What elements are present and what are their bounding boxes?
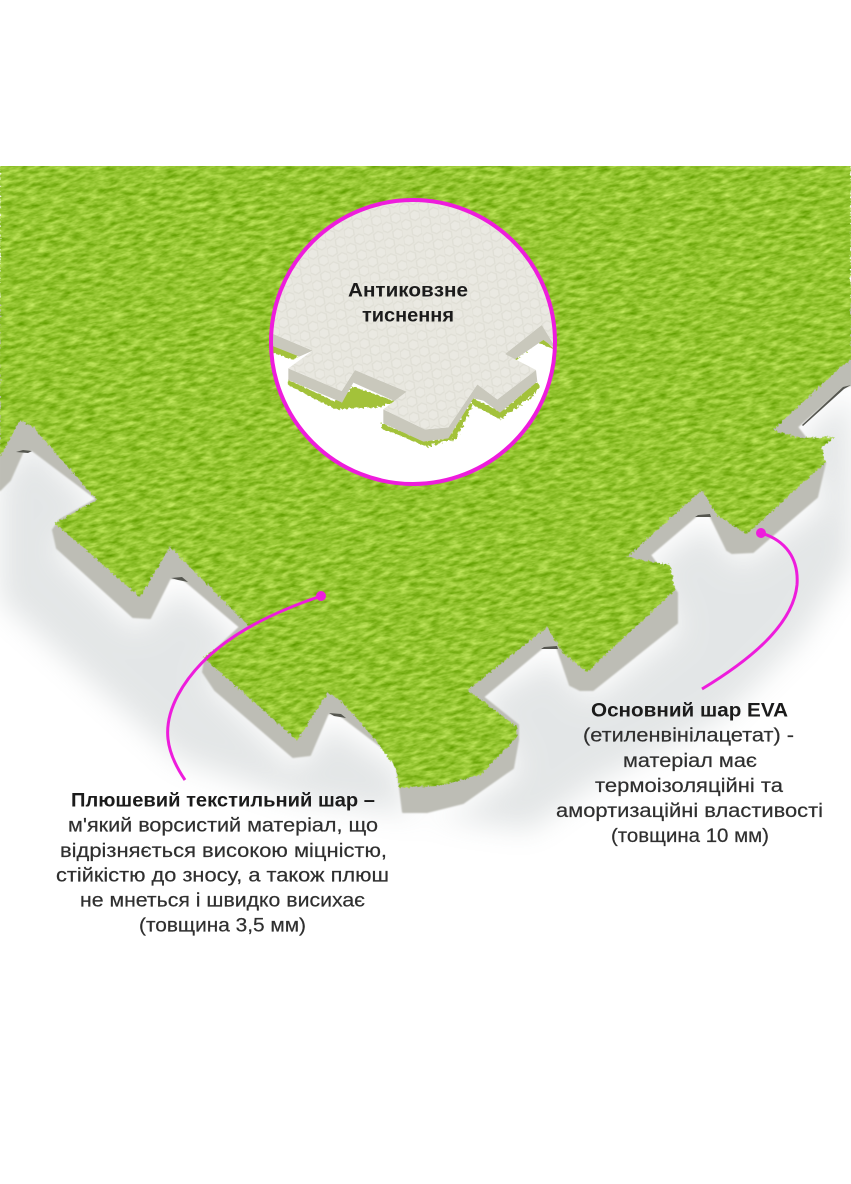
text block: EVA base layer: амортизаційні властивості — [556, 801, 823, 822]
text block: plush textile layer: Плюшевий текстильний шар – — [71, 790, 375, 812]
text block: plush textile layer: відрізняється високою міцністю, — [60, 841, 387, 862]
embossed face — [273, 202, 553, 429]
text block: EVA base layer — [556, 700, 823, 847]
text block: plush textile layer: стійкістю до зносу, а також плюш — [56, 866, 389, 886]
foam base layer — [0, 300, 851, 812]
text block: EVA base layer: матеріал має — [623, 751, 757, 772]
circle border — [271, 200, 555, 484]
text block: EVA base layer: (товщина 10 мм) — [611, 826, 769, 847]
text block: plush textile layer: не мнеться і швидко висихає — [80, 890, 365, 912]
notch shadows — [16, 385, 851, 718]
text block: plush textile layer — [56, 790, 389, 936]
circle label — [348, 280, 468, 326]
text block: plush textile layer: (товщина 3,5 мм) — [139, 916, 306, 936]
callout line: plush layer — [168, 591, 326, 780]
foam side — [270, 325, 555, 442]
text block: plush textile layer: м'який ворсистий матеріал, що — [68, 816, 378, 836]
inset photo of the underside — [273, 202, 553, 448]
floor shadow — [0, 395, 851, 830]
green fur edge — [270, 338, 555, 447]
text block: EVA base layer: Основний шар EVA — [591, 700, 788, 722]
text block: EVA base layer: (етиленвінілацетат) - — [583, 726, 794, 746]
circle background — [271, 200, 555, 484]
circle label: тиснення — [362, 306, 454, 326]
circle label: Антиковзне — [348, 280, 468, 302]
text block: EVA base layer: термоізоляційні та — [595, 776, 783, 797]
plush green top layer — [0, 166, 851, 788]
callout line: EVA layer — [702, 528, 797, 689]
magnified circle: anti-slip embossing — [260, 190, 570, 484]
